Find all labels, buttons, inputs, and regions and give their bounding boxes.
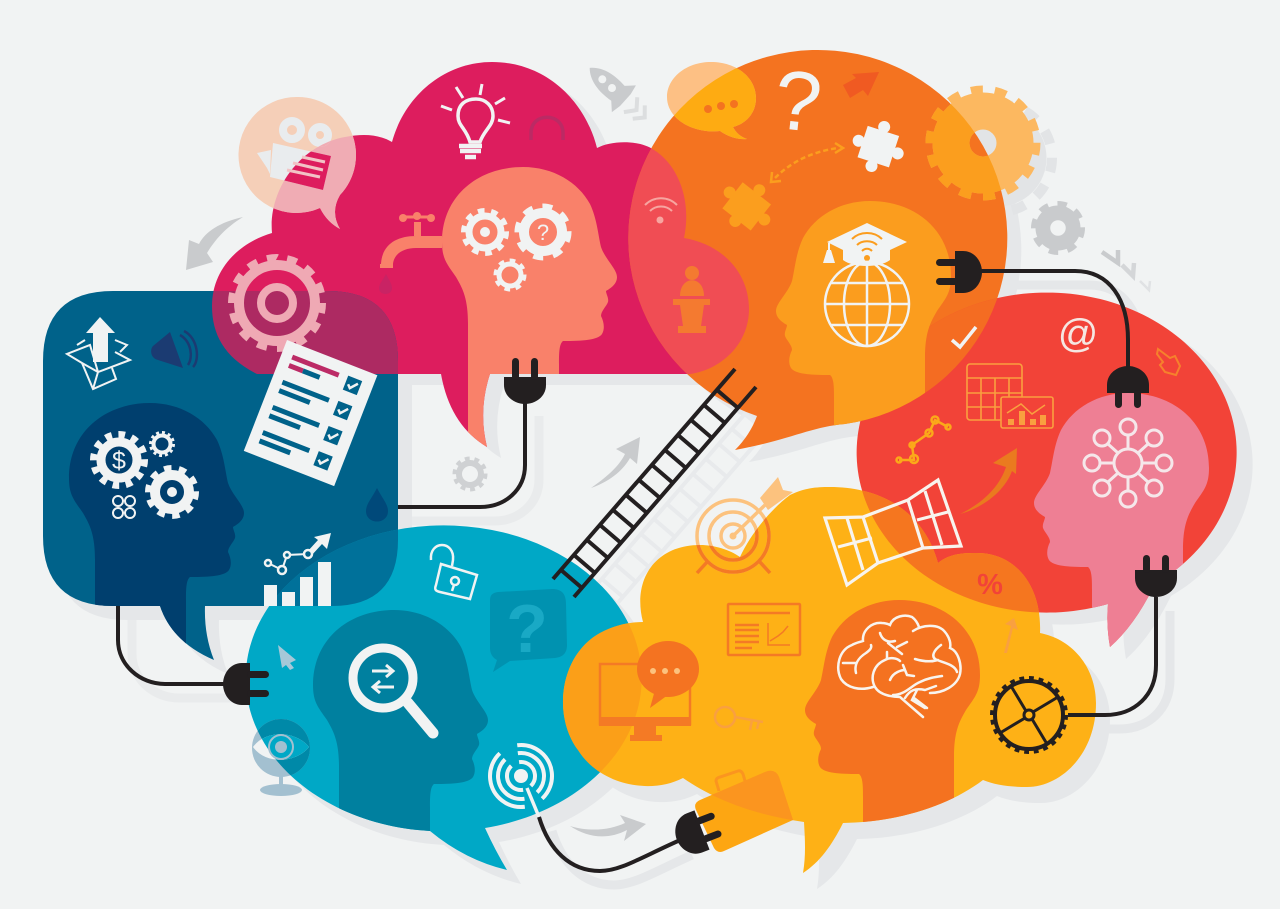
head: pink — [1034, 393, 1209, 647]
icon: monitor — [599, 664, 691, 741]
panel: cyan bubble base — [246, 525, 642, 870]
icon: presentation board — [728, 604, 800, 655]
icon: rocket — [578, 55, 657, 131]
antenna line — [527, 788, 539, 817]
head: crimson — [442, 167, 617, 464]
icon: large two tone gear — [930, 90, 1036, 196]
icon: wifi on cap — [852, 233, 882, 261]
panel: crimson cloud base — [212, 62, 749, 447]
question mark in gear: ? — [537, 220, 549, 245]
panel: orange bubble base — [628, 50, 1007, 450]
icon: monitor speech bubble — [637, 641, 699, 708]
icon: grey curved arrow left — [186, 217, 243, 270]
icon: grey arrow up — [591, 437, 640, 488]
grey background icons — [186, 55, 1150, 841]
icon: network — [1084, 419, 1172, 507]
plug: pink head — [1107, 366, 1149, 408]
icon: grey gear right — [1034, 204, 1082, 252]
icon: small arrow — [1004, 618, 1018, 653]
plug: orange — [936, 251, 982, 293]
icon: orange puzzle — [710, 168, 785, 243]
icon: large target gear — [232, 258, 322, 348]
icon: speaker — [151, 331, 197, 368]
panel: red bubble base — [857, 293, 1237, 647]
icon: drop — [366, 488, 388, 522]
icon: radio waves — [486, 741, 556, 811]
icon: eye on stand — [252, 719, 310, 796]
head: orange — [776, 201, 951, 426]
icon: film camera speech bubble — [238, 97, 356, 229]
icon: waving window grid — [825, 480, 961, 585]
head: cyan — [313, 610, 488, 831]
icon: cursor — [278, 645, 296, 670]
icon: pointing hand — [1157, 349, 1180, 375]
overlap: yellow and cyan — [562, 623, 642, 772]
panel: cyan contents — [252, 544, 567, 831]
head: orange on yellow — [805, 600, 980, 822]
icon: headphones — [531, 117, 563, 140]
at sign: @ — [1058, 312, 1098, 356]
icon: dark orange arrow — [843, 72, 879, 98]
overlap: orange and red — [860, 298, 998, 422]
icon: head gears with dollar — [94, 433, 196, 518]
icon: chart card — [1001, 397, 1053, 428]
icon: check mark — [952, 327, 976, 347]
icon: light bulb — [441, 84, 510, 157]
icon: lectern speaker — [673, 266, 710, 333]
overlap: crimson and orange — [628, 148, 749, 374]
icon: rising arrow — [960, 448, 1017, 514]
overlap: blue and cyan — [277, 530, 398, 606]
icon: head gears — [464, 207, 568, 289]
icon: wifi — [645, 198, 677, 224]
plug: blue — [223, 663, 269, 705]
icon: briefcase — [695, 771, 793, 852]
plug: right wire — [1135, 555, 1177, 597]
icon: checklist — [244, 340, 377, 486]
icon: grey gear top right shadow — [944, 104, 1052, 212]
dollar sign: $ — [112, 447, 126, 475]
head: blue — [69, 403, 244, 644]
panel: blue contents — [64, 317, 388, 644]
icon: globe — [825, 262, 909, 346]
plug: crimson — [504, 358, 546, 404]
icon: brain — [838, 616, 961, 717]
icon: box with arrow — [67, 317, 130, 389]
wires — [118, 271, 1156, 871]
panel: blue rounded bubble base — [43, 291, 398, 660]
icon: graduation cap — [823, 223, 907, 266]
plug: briefcase — [669, 804, 725, 859]
icon: grey arrow right — [570, 815, 646, 841]
icon: open padlock — [431, 545, 477, 599]
overlap: crimson and blue — [212, 291, 398, 374]
question mark: ? — [770, 52, 826, 150]
icon: water drop — [379, 274, 392, 294]
question mark in bubble: ? — [506, 591, 548, 667]
percent sign: % — [977, 569, 1003, 601]
icon: speech bubble — [667, 62, 756, 139]
panel: yellow contents — [599, 477, 980, 897]
icon: grey gear centre — [455, 459, 485, 489]
icon: growth chart — [264, 533, 331, 606]
icon: question bubble — [490, 589, 567, 672]
ladder — [553, 369, 756, 597]
icon: water tap — [380, 212, 442, 268]
icon: magnifier — [353, 648, 433, 733]
icon: grey chevrons — [1102, 250, 1150, 290]
icon: dotted arrow — [771, 143, 843, 182]
icon: node chain — [896, 416, 950, 463]
panel: orange contents — [645, 52, 1036, 498]
panel: red contents — [895, 318, 1209, 653]
icon: key — [715, 707, 763, 730]
panel: crimson contents — [232, 84, 617, 464]
gear part inside orange bubble — [926, 104, 1001, 200]
icon: white puzzle — [845, 113, 912, 180]
panel: yellow cloud base — [563, 487, 1096, 873]
icon: target — [697, 477, 793, 573]
icon: table — [967, 364, 1022, 420]
icon: black gear wheel — [992, 678, 1066, 752]
overlap: yellow and red — [862, 490, 1039, 612]
